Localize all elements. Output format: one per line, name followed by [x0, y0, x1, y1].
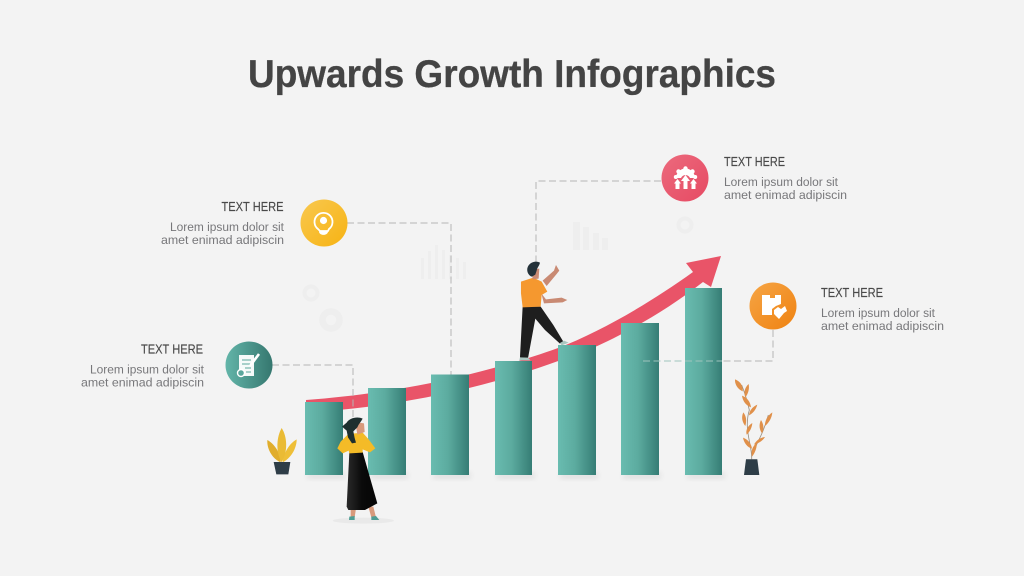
callout: orange: [750, 282, 944, 333]
icon: puzzle pieces: [750, 282, 796, 330]
callout: teal: Lorem ipsum dolor sit: [90, 362, 205, 376]
orange branch plant: [735, 379, 772, 475]
callout: yellow: Lorem ipsum dolor sit: [170, 220, 285, 234]
connector overlay on bars: [643, 360, 722, 362]
callout: orange: amet enimad adipiscin: [821, 319, 944, 333]
callout: teal: [81, 342, 272, 390]
background ghost icons: [304, 218, 692, 328]
red growth arrow: [306, 256, 721, 412]
callout: orange: Lorem ipsum dolor sit: [821, 306, 936, 320]
callout: red: TEXT HERE: [724, 154, 785, 169]
yellow potted plant: [267, 428, 297, 474]
icon: gear with arrows: [662, 154, 708, 202]
callout: teal: TEXT HERE: [141, 342, 203, 356]
icon: light bulb: [300, 200, 348, 246]
callout: red: [662, 154, 847, 202]
bar chart: [305, 288, 725, 479]
callout: teal: amet enimad adipiscin: [81, 376, 204, 390]
callout: yellow: TEXT HERE: [222, 199, 284, 214]
callout: red: amet enimad adipiscin: [724, 188, 847, 202]
man climbing: [519, 262, 569, 360]
title: Upwards Growth Infographics: [248, 53, 776, 96]
callout: orange: TEXT HERE: [821, 285, 883, 300]
icon: notepad and pen: [226, 342, 272, 388]
callout: yellow: [161, 199, 348, 247]
callout: red: Lorem ipsum dolor sit: [724, 175, 839, 189]
callout: yellow: amet enimad adipiscin: [161, 233, 284, 247]
woman standing: [333, 417, 394, 524]
dashed connector lines: [272, 181, 773, 420]
